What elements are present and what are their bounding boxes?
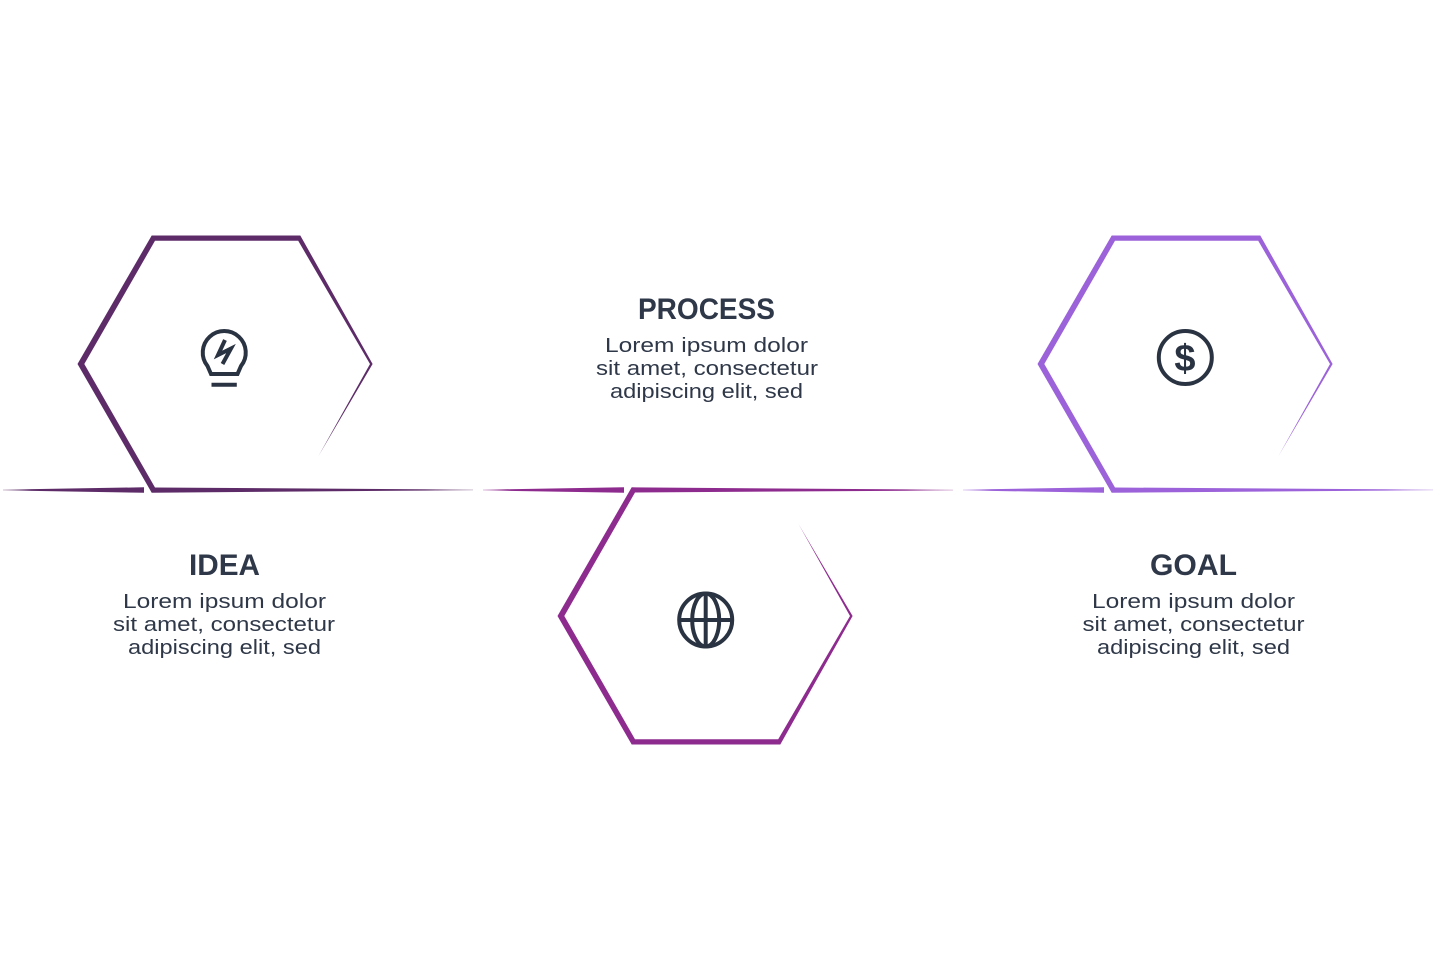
panel: goal (963, 236, 1433, 659)
text block: goal: sit amet, consectetur (1082, 614, 1305, 636)
panel: idea (3, 236, 473, 659)
text block: idea (113, 591, 335, 659)
text block: idea: sit amet, consectetur (113, 614, 335, 636)
hexagon outline: idea (78, 236, 473, 493)
text block: goal: Lorem ipsum dolor (1092, 591, 1295, 613)
heading: idea: IDEA (189, 549, 260, 582)
text block: process: Lorem ipsum dolor (605, 335, 808, 357)
hexagon outline: process (558, 487, 953, 744)
baseline stub: process (483, 487, 624, 493)
text block: idea: Lorem ipsum dolor (123, 591, 326, 613)
heading: process: PROCESS (638, 293, 775, 326)
icon: dollar coin (1159, 331, 1212, 384)
icon: globe (679, 594, 732, 646)
baseline stub: goal (963, 487, 1104, 493)
panel: process (483, 293, 953, 744)
baseline stub: idea (3, 487, 144, 493)
text block: process: sit amet, consectetur (596, 358, 818, 380)
hexagon outline: goal (1038, 236, 1433, 493)
icon: light bulb (203, 331, 246, 385)
heading: goal: GOAL (1150, 549, 1237, 582)
text block: goal (1082, 591, 1305, 659)
text block: idea: adipiscing elit, sed (128, 637, 321, 659)
text block: process: adipiscing elit, sed (610, 381, 803, 403)
icon: dollar coin: $ (1174, 338, 1196, 380)
text block: process (596, 335, 818, 403)
text block: goal: adipiscing elit, sed (1097, 637, 1290, 659)
